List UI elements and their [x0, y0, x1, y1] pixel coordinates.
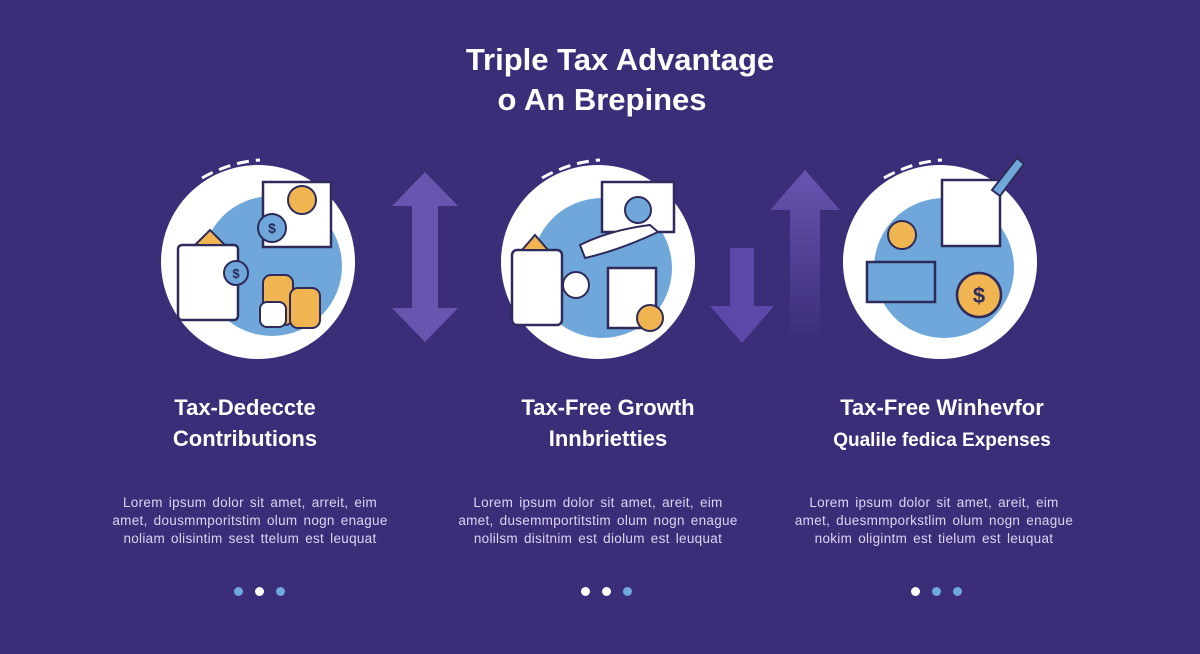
- body text 2: nolilsm disitnim est diolum est leuquat: [474, 531, 722, 546]
- title: Triple Tax Advantage: [466, 42, 774, 77]
- heading 1: Contributions: [173, 426, 317, 451]
- icon circle 1: $: [268, 220, 276, 236]
- body text 3: [795, 495, 1073, 546]
- dots 1: [234, 587, 285, 596]
- heading 2: [521, 395, 695, 451]
- body text 1: noliam olisintim sest ttelum est leuquat: [123, 531, 377, 546]
- body text 2: [458, 495, 738, 546]
- arrow: up: [770, 170, 840, 316]
- body text 2: Lorem ipsum dolor sit amet, areit, eim: [473, 495, 723, 510]
- dots 3: [911, 587, 962, 596]
- heading 3: Tax-Free Winhevfor: [840, 395, 1044, 420]
- icon circle 1: $: [232, 266, 240, 281]
- body text 3: amet, duesmmporkstlim olum nogn enague: [795, 513, 1073, 528]
- body text 3: Lorem ipsum dolor sit amet, areit, eim: [809, 495, 1059, 510]
- icon circle 3: $: [973, 283, 985, 308]
- heading 1: [173, 395, 317, 451]
- body text 2: amet, dusemmportitstim olum nogn enague: [458, 513, 738, 528]
- heading 3: [833, 395, 1051, 451]
- arrow: double vertical 1: [392, 172, 458, 342]
- icon circle 3: [843, 156, 1037, 359]
- arrow: down: [710, 248, 774, 343]
- subtitle: o An Brepines: [498, 82, 706, 117]
- heading 2: Innbrietties: [549, 426, 667, 451]
- body text 1: [112, 495, 388, 546]
- icon circle 1: [161, 158, 355, 359]
- heading 2: Tax-Free Growth: [521, 395, 695, 420]
- dots 2: [581, 587, 632, 596]
- heading 1: Tax-Dedeccte: [174, 395, 316, 420]
- icon circle 2: [501, 158, 695, 359]
- body text 1: Lorem ipsum dolor sit amet, arreit, eim: [123, 495, 377, 510]
- heading 3: Qualile fedica Expenses: [833, 430, 1051, 451]
- body text 3: nokim oligintm est tielum est leuquat: [815, 531, 1053, 546]
- body text 1: amet, dousmmporitstim olum nogn enague: [112, 513, 388, 528]
